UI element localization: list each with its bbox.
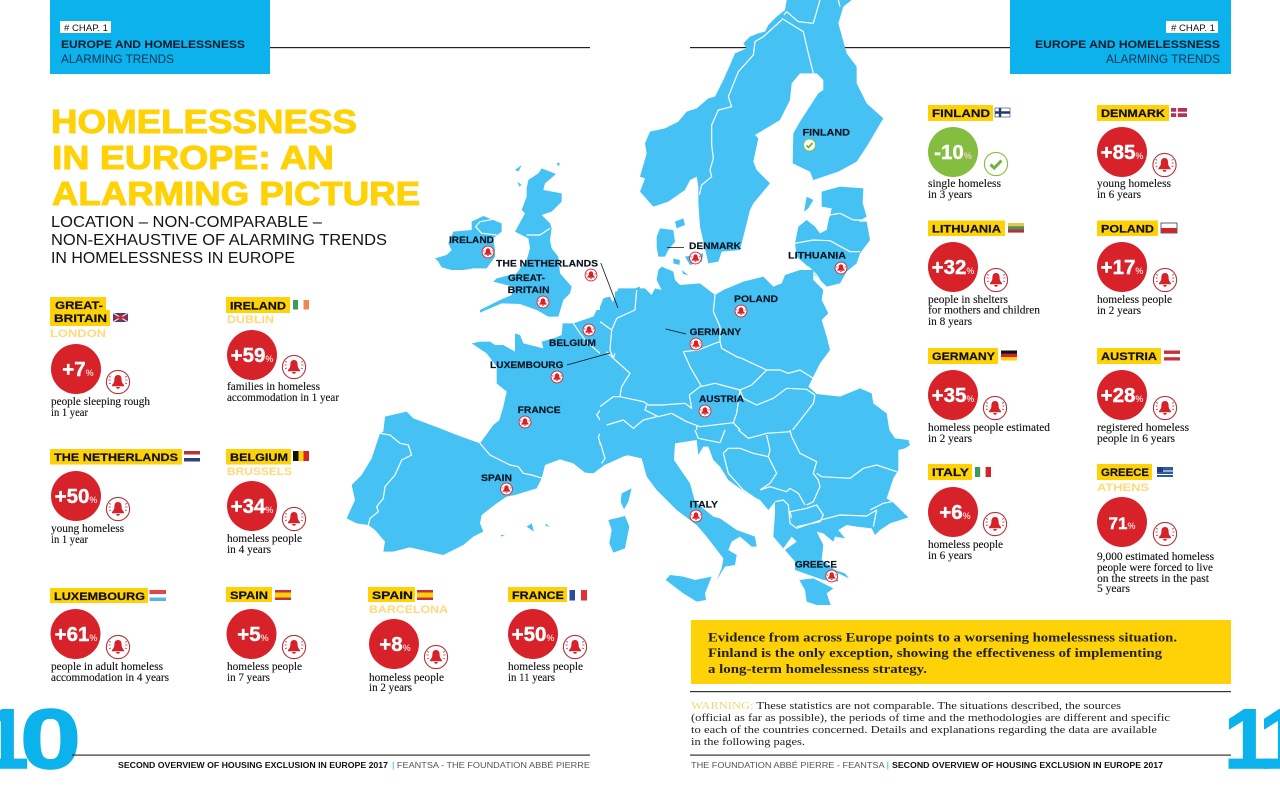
card: Ireland, Dublin: IRELAND xyxy=(230,300,286,312)
card: Ireland, Dublin: DUBLIN xyxy=(227,314,274,326)
card: Poland: POLAND xyxy=(1101,224,1154,236)
card: Great Britain, London: GREAT- xyxy=(55,300,103,312)
card: Finland: FINLAND xyxy=(932,108,990,120)
map label: Italy: ITALY xyxy=(690,500,719,511)
card: Poland xyxy=(1097,220,1177,317)
card: Denmark: young homeless xyxy=(1097,178,1172,190)
chapter header: left page: # CHAP. 1 xyxy=(64,23,108,34)
map label: Denmark xyxy=(689,241,741,264)
title: IN EUROPE: AN xyxy=(52,139,334,176)
map label: Lithuania xyxy=(788,251,847,274)
warning note: WARNING: These statistics are not comparable. The situations described, the sources xyxy=(691,700,1121,712)
map label: France xyxy=(518,405,561,428)
card: Spain: in 7 years xyxy=(227,672,270,684)
card: France xyxy=(508,587,587,684)
map label: Austria xyxy=(699,394,744,417)
chapter header: left page xyxy=(50,0,270,74)
chapter header: left page: ALARMING TRENDS xyxy=(61,54,174,66)
warning note xyxy=(691,700,1170,748)
title: ALARMING PICTURE xyxy=(52,175,420,212)
map label: Poland xyxy=(734,294,778,317)
card: Lithuania: +32% xyxy=(932,256,974,279)
map label: Great Britain: GREAT- xyxy=(508,273,545,284)
card: Great Britain, London: +7% xyxy=(62,358,94,381)
card: Great Britain, London: BRITAIN xyxy=(54,313,107,325)
card: Belgium, Brussels: in 4 years xyxy=(227,544,272,556)
map of Europe xyxy=(347,0,910,605)
card: France: homeless people xyxy=(508,661,583,673)
card: Finland: single homeless xyxy=(928,178,1002,190)
title: HOMELESSNESS xyxy=(51,103,357,140)
chapter header: right page: # CHAP. 1 xyxy=(1171,23,1215,34)
card: Greece, Athens: 5 years xyxy=(1097,583,1131,595)
card: Belgium, Brussels xyxy=(226,449,309,556)
card: Austria xyxy=(1097,348,1190,445)
card: Great Britain, London: LONDON xyxy=(50,328,106,340)
card: Ireland, Dublin: +59% xyxy=(231,344,273,367)
callout: evidence: a long-term homelessness strategy. xyxy=(708,661,927,676)
card: Denmark xyxy=(1097,105,1187,201)
map label: Ireland xyxy=(449,235,494,258)
card: Spain, Barcelona xyxy=(368,587,448,694)
card: Germany: +35% xyxy=(932,384,974,407)
Baltic states xyxy=(795,187,870,287)
map label: Spain: SPAIN xyxy=(481,473,512,484)
card: Germany: GERMANY xyxy=(932,351,996,363)
card: Greece, Athens: on the streets in the past xyxy=(1097,573,1210,585)
card: Belgium, Brussels: BRUSSELS xyxy=(227,466,292,478)
map label: The Netherlands xyxy=(496,258,598,281)
Corsica and Sardinia xyxy=(608,488,632,553)
card: Luxembourg xyxy=(50,588,170,684)
card: Greece, Athens: 9,000 estimated homeless xyxy=(1097,551,1215,563)
map label: Finland: FINLAND xyxy=(802,128,850,139)
footer: left page: | FEANTSA - THE FOUNDATION ABBÉ PIERRE xyxy=(392,761,590,770)
card: Germany: in 2 years xyxy=(928,433,973,445)
map label: Greece xyxy=(795,560,838,582)
card: The Netherlands: in 1 year xyxy=(51,534,88,546)
Balearic islands xyxy=(501,523,550,537)
card: Lithuania: for mothers and children xyxy=(928,304,1040,316)
card: The Netherlands: THE NETHERLANDS xyxy=(54,452,178,464)
map label: Poland: POLAND xyxy=(734,294,778,305)
chapter header: left page: EUROPE AND HOMELESSNESS xyxy=(61,39,245,51)
card: The Netherlands xyxy=(50,449,200,546)
card: The Netherlands: young homeless xyxy=(51,523,125,535)
card: Denmark: +85% xyxy=(1101,141,1143,164)
map label: Ireland: IRELAND xyxy=(449,235,494,246)
card: Spain: +5% xyxy=(237,623,269,646)
card: Lithuania: people in shelters xyxy=(928,294,1009,306)
callout: evidence: Finland is the only exception, showing the effectiveness of implementing xyxy=(708,645,1163,660)
card: Italy xyxy=(928,464,1007,562)
card: Poland: +17% xyxy=(1101,256,1143,279)
card: Ireland, Dublin: accommodation in 1 year xyxy=(227,392,339,404)
Great Britain xyxy=(480,163,572,317)
card: Greece, Athens: ATHENS xyxy=(1097,482,1149,494)
card: Italy: in 6 years xyxy=(928,550,973,562)
card: Greece, Athens: 71% xyxy=(1109,514,1135,533)
map label: Austria: AUSTRIA xyxy=(699,394,744,405)
card: Luxembourg: LUXEMBOURG xyxy=(54,591,145,603)
map label: Lithuania: LITHUANIA xyxy=(788,251,846,262)
page number 10: 0 xyxy=(20,692,81,786)
subtitle xyxy=(51,214,387,267)
card: Austria: +28% xyxy=(1101,384,1143,407)
card: Spain, Barcelona: in 2 years xyxy=(369,682,412,694)
map label: Germany: GERMANY xyxy=(690,327,742,338)
card: Finland xyxy=(928,105,1010,201)
map label: Luxembourg xyxy=(490,360,564,383)
footer: left page xyxy=(118,761,590,770)
card: Great Britain, London: in 1 year xyxy=(51,407,88,419)
map label: Belgium: BELGIUM xyxy=(549,338,596,349)
Sicily xyxy=(666,575,712,602)
footer: left page: SECOND OVERVIEW OF HOUSING EXCLUSION IN EUROPE 2017 xyxy=(118,761,389,770)
card: Denmark: DENMARK xyxy=(1101,108,1165,120)
subtitle: IN HOMELESSNESS IN EUROPE xyxy=(51,250,295,267)
card: Spain: SPAIN xyxy=(230,590,268,602)
card: Spain, Barcelona: BARCELONA xyxy=(369,604,448,616)
card: Ireland, Dublin xyxy=(226,297,339,404)
map label: Spain xyxy=(481,473,512,495)
card: Finland: in 3 years xyxy=(928,189,973,201)
card: Spain xyxy=(226,587,306,684)
card: Belgium, Brussels: +34% xyxy=(231,495,273,518)
card: Luxembourg: accommodation in 4 years xyxy=(51,672,170,684)
card: Greece, Athens: people were forced to live xyxy=(1097,562,1213,574)
subtitle: LOCATION – NON-COMPARABLE – xyxy=(51,214,322,231)
Netherlands coast xyxy=(593,287,640,340)
warning note: in the following pages. xyxy=(691,736,805,748)
card: Spain, Barcelona: homeless people xyxy=(369,672,444,684)
Denmark xyxy=(657,218,703,280)
map label: Italy xyxy=(690,500,719,522)
map label: The Netherlands: THE NETHERLANDS xyxy=(496,258,598,270)
Central Europe xyxy=(600,270,889,430)
map label: Belgium xyxy=(549,324,596,349)
chapter header: right page: ALARMING TRENDS xyxy=(1106,54,1220,66)
card: Poland: homeless people xyxy=(1097,294,1172,306)
card: Spain, Barcelona: SPAIN xyxy=(372,590,413,602)
map label: Finland xyxy=(802,128,850,151)
card: Poland: in 2 years xyxy=(1097,305,1142,317)
card: Ireland, Dublin: families in homeless xyxy=(227,381,321,393)
card: Lithuania: in 8 years xyxy=(928,316,973,328)
Peloponnese xyxy=(799,578,833,605)
footer: right page xyxy=(691,761,1164,770)
card: Great Britain, London xyxy=(50,297,150,419)
card: Italy: homeless people xyxy=(928,539,1003,551)
page number 10 xyxy=(0,692,81,786)
Scandinavia and Finland xyxy=(640,0,883,263)
card: France: +50% xyxy=(512,623,554,646)
warning note: (official as far as possible), the periods of time and the methodologies are different and specific xyxy=(691,712,1170,724)
card: Italy: +6% xyxy=(939,501,971,524)
warning note: to each of the countries concerned. Details and explanations regarding the data are available xyxy=(691,724,1157,736)
footer: right page: THE FOUNDATION ABBÉ PIERRE - FEANTSA | xyxy=(691,761,889,770)
card: France: FRANCE xyxy=(512,590,564,602)
subtitle: NON-EXHAUSTIVE OF ALARMING TRENDS xyxy=(51,232,387,249)
card: Germany xyxy=(928,348,1050,445)
Italy and the Balkans xyxy=(600,430,910,582)
card: The Netherlands: +50% xyxy=(55,485,97,508)
card: Belgium, Brussels: BELGIUM xyxy=(230,452,288,464)
leader lines xyxy=(567,248,686,365)
card: Belgium, Brussels: homeless people xyxy=(227,533,302,545)
map label: Great Britain: BRITAIN xyxy=(508,285,550,296)
card: Italy: ITALY xyxy=(932,467,970,479)
title xyxy=(51,103,420,212)
map label: France: FRANCE xyxy=(518,405,561,416)
France, Iberia and Benelux xyxy=(347,310,630,555)
map label: Denmark: DENMARK xyxy=(689,241,741,252)
chapter header: right page xyxy=(1010,0,1231,74)
card: Germany: homeless people estimated xyxy=(928,422,1050,434)
card: Spain, Barcelona: +8% xyxy=(379,633,411,656)
footer: right page: SECOND OVERVIEW OF HOUSING EXCLUSION IN EUROPE 2017 xyxy=(892,761,1164,770)
card: Great Britain, London: people sleeping rough xyxy=(51,396,150,408)
card: Denmark: in 6 years xyxy=(1097,189,1142,201)
card: Spain: homeless people xyxy=(227,661,302,673)
card: Austria: people in 6 years xyxy=(1097,433,1176,445)
card: Austria: AUSTRIA xyxy=(1101,351,1157,363)
card: Lithuania xyxy=(928,220,1040,328)
map label: Great Britain xyxy=(508,273,550,308)
card: Greece, Athens xyxy=(1097,464,1215,595)
chapter header: right page: EUROPE AND HOMELESSNESS xyxy=(1035,39,1220,51)
card: Lithuania: LITHUANIA xyxy=(932,224,1001,236)
card: Finland: -10% xyxy=(934,141,972,164)
map label: Luxembourg: LUXEMBOURG xyxy=(490,360,564,371)
callout: evidence xyxy=(691,620,1231,684)
Ireland xyxy=(435,216,502,270)
map label: Germany xyxy=(690,327,742,350)
card: Luxembourg: +61% xyxy=(55,623,97,646)
card: Greece, Athens: GREECE xyxy=(1101,467,1149,479)
card: Austria: registered homeless xyxy=(1097,422,1190,434)
card: France: in 11 years xyxy=(508,672,555,684)
map label: Greece: GREECE xyxy=(795,560,837,571)
callout: evidence: Evidence from across Europe points to a worsening homelessness situation. xyxy=(708,630,1177,644)
card: Luxembourg: people in adult homeless xyxy=(51,661,164,673)
